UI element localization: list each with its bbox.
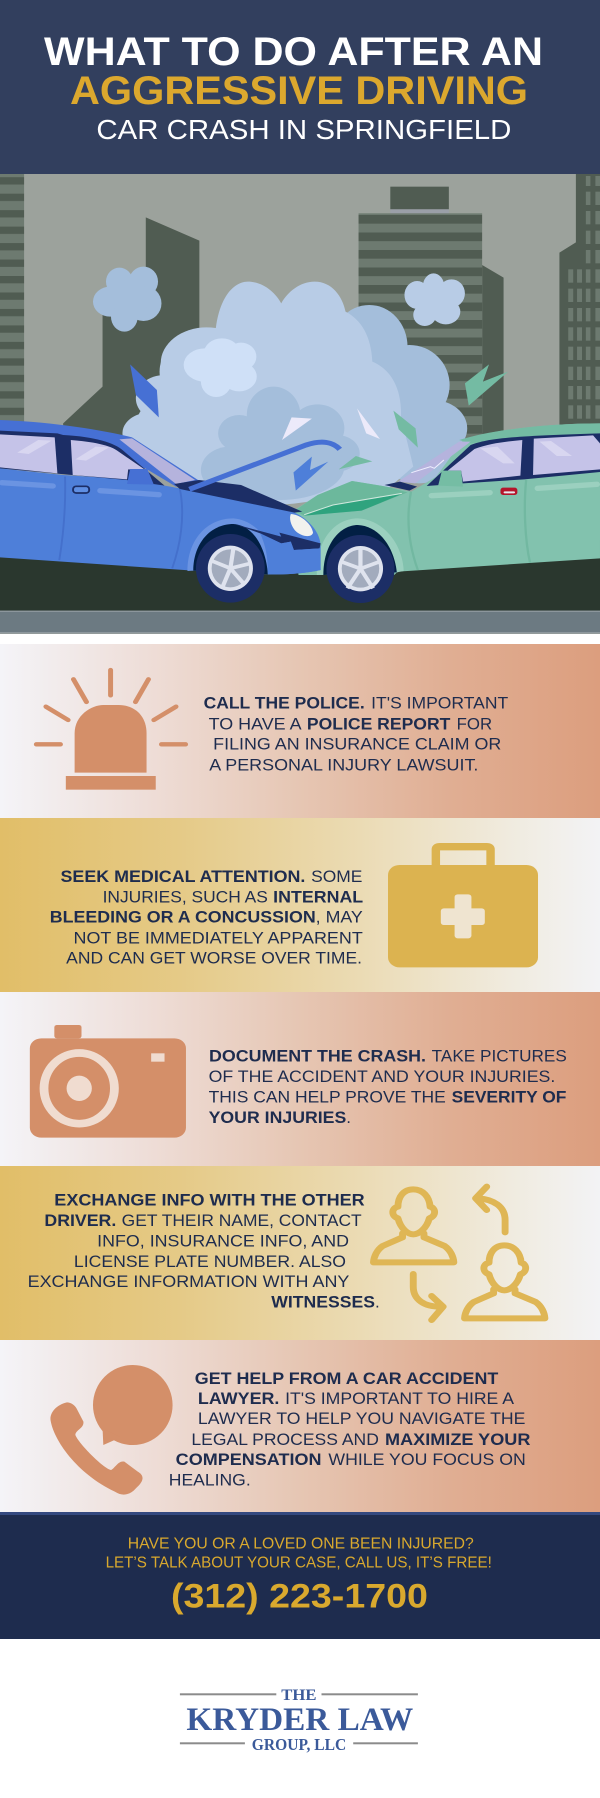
debris shards [130,364,508,491]
logo: The Kryder Law Group: KRYDER LAW [186,1702,413,1738]
text: call the police: FOR [457,714,492,733]
green car mirror [438,471,463,487]
call to action line 2: LET’S TALK ABOUT YOUR CASE, CALL US, IT’S FREE! [106,1554,492,1571]
text: seek medical attention: , MAY [316,908,363,927]
text: document the crash: . [346,1108,351,1127]
icon: police siren [36,670,186,790]
panel: document the crash [0,992,600,1166]
blue car wheel [187,518,321,603]
text: seek medical attention: INJURIES, SUCH AS [103,887,268,906]
logo: The Kryder Law Group [180,1687,418,1754]
text: call the police: CALL THE POLICE. [204,693,365,712]
text: call the police: FILING AN INSURANCE CLAIM OR [213,734,501,753]
text: document the crash: TAKE PICTURES [432,1047,567,1066]
city buildings [0,174,600,440]
raised hood [189,442,340,489]
main smoke cloud [122,282,413,505]
text: seek medical attention: AND CAN GET WORSE OVER TIME. [66,948,362,967]
small smoke puff left [93,267,161,332]
green car wheel [317,518,404,603]
blue car door seams and trim [59,477,182,568]
text: exchange info: GET THEIR NAME, CONTACT [122,1211,362,1230]
blue car windows [0,431,165,486]
text: call the police: TO HAVE A [209,714,302,733]
sky [0,174,600,634]
text: exchange info: WITNESSES [271,1293,375,1312]
header panel [0,0,600,174]
pavement [0,611,600,633]
text: document the crash: DOCUMENT THE CRASH. [209,1047,426,1066]
blue car body [0,468,321,574]
text: get help from a lawyer: IT'S IMPORTANT TO HIRE A [285,1389,515,1408]
text: seek medical attention: INTERNAL [273,887,363,906]
panel: exchange info [0,1166,600,1340]
footer call to action panel [0,1512,600,1639]
green car windows [427,433,600,486]
icon: phone with speech bubble [50,1365,173,1495]
back smoke cloud [331,305,467,483]
blue car mirror [127,469,154,485]
text: seek medical attention [50,867,363,967]
green car hood and body [295,423,600,575]
text: get help from a lawyer: LAWYER. [198,1389,279,1408]
road [0,540,600,611]
text: exchange info: DRIVER. [44,1211,116,1230]
green car [295,423,600,603]
text: get help from a lawyer: LEGAL PROCESS AND [191,1430,379,1449]
text: exchange info: LICENSE PLATE NUMBER. ALSO [74,1252,346,1271]
text: seek medical attention: BLEEDING OR A CONCUSSION [50,908,316,927]
panel: get help from a lawyer [0,1340,600,1512]
text: get help from a lawyer: COMPENSATION [176,1450,322,1469]
inner smoke cloud [201,387,360,500]
text: document the crash: THIS CAN HELP PROVE THE [209,1088,446,1107]
text: exchange info: INFO, INSURANCE INFO, AND [97,1231,349,1250]
text: call the police: IT'S IMPORTANT [371,693,508,712]
blue car headlight [290,514,313,536]
text: get help from a lawyer: WHILE YOU FOCUS ON [328,1450,526,1469]
text: get help from a lawyer: GET HELP FROM A CAR ACCIDENT [195,1369,499,1388]
text: get help from a lawyer: HEALING. [169,1471,251,1490]
logo: The Kryder Law Group: THE [281,1687,316,1704]
title line 3: CAR CRASH IN SPRINGFIELD [96,114,511,145]
call to action line 1: HAVE YOU OR A LOVED ONE BEEN INJURED? [128,1535,474,1552]
text: call the police: POLICE REPORT [307,714,451,733]
text: call the police: A PERSONAL INJURY LAWSUIT. [209,755,478,774]
text: document the crash: OF THE ACCIDENT AND YOUR INJURIES. [209,1067,555,1086]
icon: two people exchanging info [373,1187,545,1320]
panel: seek medical attention [0,818,600,992]
text: seek medical attention: SOME [311,867,362,886]
text: exchange info: . [375,1293,380,1312]
phone number: (312) 223-1700 [171,1578,428,1616]
text: exchange info: EXCHANGE INFORMATION WITH ANY [28,1272,349,1291]
text: seek medical attention: SEEK MEDICAL ATTENTION. [60,867,305,886]
logo: The Kryder Law Group: GROUP, LLC [252,1735,346,1754]
text: document the crash [209,1047,567,1127]
text: get help from a lawyer: MAXIMIZE YOUR [385,1430,530,1449]
green car door handle [501,488,517,495]
blue car [0,420,340,603]
icon: first aid kit [388,847,538,967]
icon: camera [30,1025,186,1138]
text: seek medical attention: NOT BE IMMEDIATELY APPARENT [74,928,363,947]
text: document the crash: SEVERITY OF [452,1088,566,1107]
text: document the crash: YOUR INJURIES [209,1108,346,1127]
panel: call the police [0,644,600,818]
text: get help from a lawyer: LAWYER TO HELP YOU NAVIGATE THE [198,1409,525,1428]
text: exchange info [28,1191,380,1312]
text: get help from a lawyer [169,1369,530,1490]
text: exchange info: EXCHANGE INFO WITH THE OTHER [54,1191,365,1210]
small smoke puff right [404,273,465,326]
illustration: car crash scene [0,174,600,634]
text: call the police [204,693,508,774]
blue car door handle [73,486,89,493]
title line 1: WHAT TO DO AFTER AN [44,30,543,74]
title line 2: AGGRESSIVE DRIVING [70,69,528,113]
light smoke puff [184,338,257,397]
